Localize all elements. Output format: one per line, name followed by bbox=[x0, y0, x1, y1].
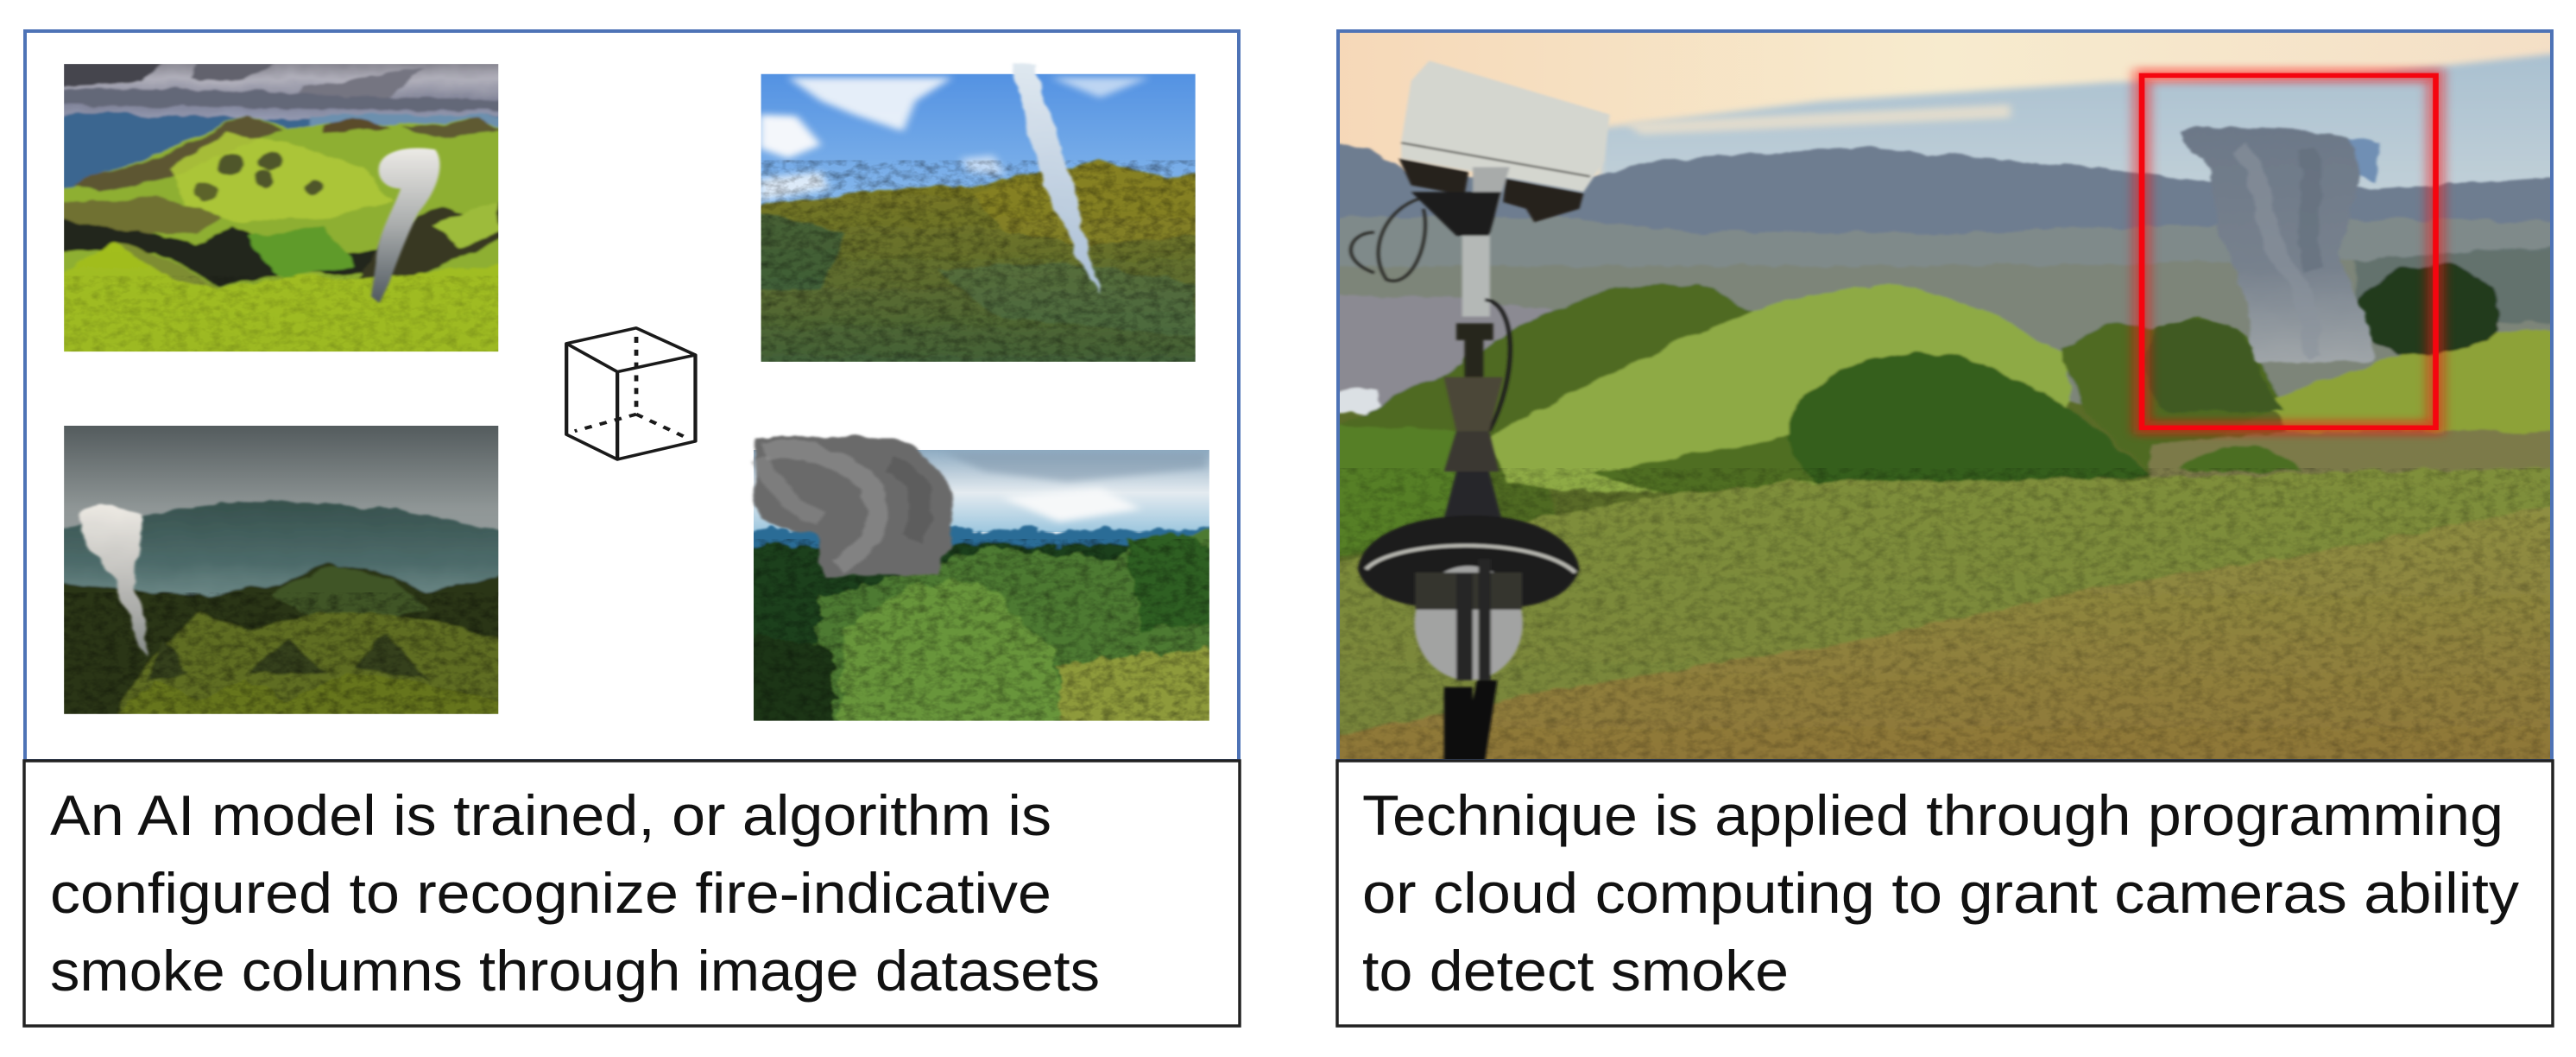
smoke column bbox=[2184, 127, 2378, 363]
image: green hills with smoke plume bbox=[64, 64, 499, 352]
lamp post bbox=[1485, 300, 1510, 431]
thin smoke plume bbox=[1013, 64, 1100, 296]
image: misty forest with plume bbox=[64, 426, 499, 714]
panel: deployment bbox=[1321, 27, 2569, 768]
panel frame: blue outline bbox=[1338, 31, 2552, 761]
tree in front of smoke bbox=[2147, 320, 2282, 411]
panel frame: blue outline bbox=[25, 31, 1239, 761]
image: hillside with camera and detected smoke bbox=[1321, 27, 2569, 768]
smoke plume bbox=[79, 504, 148, 656]
dark smoke cloud bbox=[755, 438, 953, 576]
caption: deployment: or cloud computing to grant cameras ability bbox=[1362, 861, 2519, 925]
caption: deployment: to detect smoke bbox=[1362, 939, 1789, 1003]
caption: training: configured to recognize fire-indicative bbox=[50, 861, 1051, 925]
image: forest hill with thin plume bbox=[747, 64, 1207, 370]
detection box glow bbox=[2142, 75, 2435, 427]
caption: training: An AI model is trained, or algorithm is bbox=[50, 783, 1051, 847]
icon: wireframe cube bbox=[566, 328, 695, 459]
caption: training: smoke columns through image datasets bbox=[50, 939, 1100, 1003]
panel: training bbox=[23, 29, 1241, 760]
caption: training bbox=[24, 761, 1240, 1026]
detection box bbox=[2142, 75, 2435, 427]
caption: deployment bbox=[1337, 761, 2553, 1026]
caption: deployment: Technique is applied through programming bbox=[1362, 783, 2503, 847]
icon: security camera bbox=[1351, 60, 1610, 761]
smoke plume bbox=[371, 148, 439, 303]
image: valley with dark smoke cloud bbox=[739, 438, 1223, 731]
